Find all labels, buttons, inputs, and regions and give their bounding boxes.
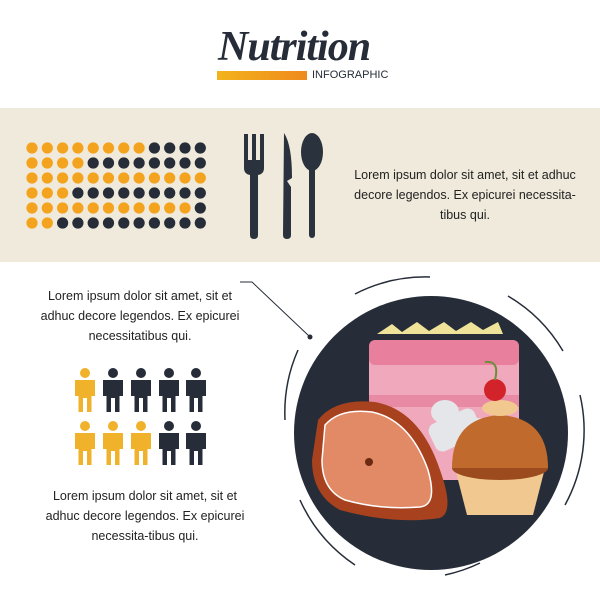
cupcake [452, 362, 548, 515]
text: top right: Lorem ipsum dolor sit amet, sit et adhuc decore legendos. Ex epicurei necessita-tibus qui. [354, 168, 576, 222]
banner background [0, 108, 600, 262]
title: INFOGRAPHIC [312, 69, 388, 81]
title: Nutrition [218, 24, 370, 70]
bone [426, 400, 496, 454]
decorative arcs [285, 277, 584, 575]
food circle [294, 296, 568, 570]
people chart [75, 368, 206, 465]
cake [369, 322, 519, 480]
text: left top: Lorem ipsum dolor sit amet, sit et adhuc decore legendos. Ex epicurei necessitatibus qui. [41, 289, 239, 343]
connector line [240, 282, 312, 340]
text: left bottom: Lorem ipsum dolor sit amet, sit et adhuc decore legendos. Ex epicurei necessita-tibus qui. [46, 489, 244, 543]
ham [312, 401, 448, 520]
dot grid [26, 142, 206, 229]
icon: cutlery [244, 133, 323, 239]
